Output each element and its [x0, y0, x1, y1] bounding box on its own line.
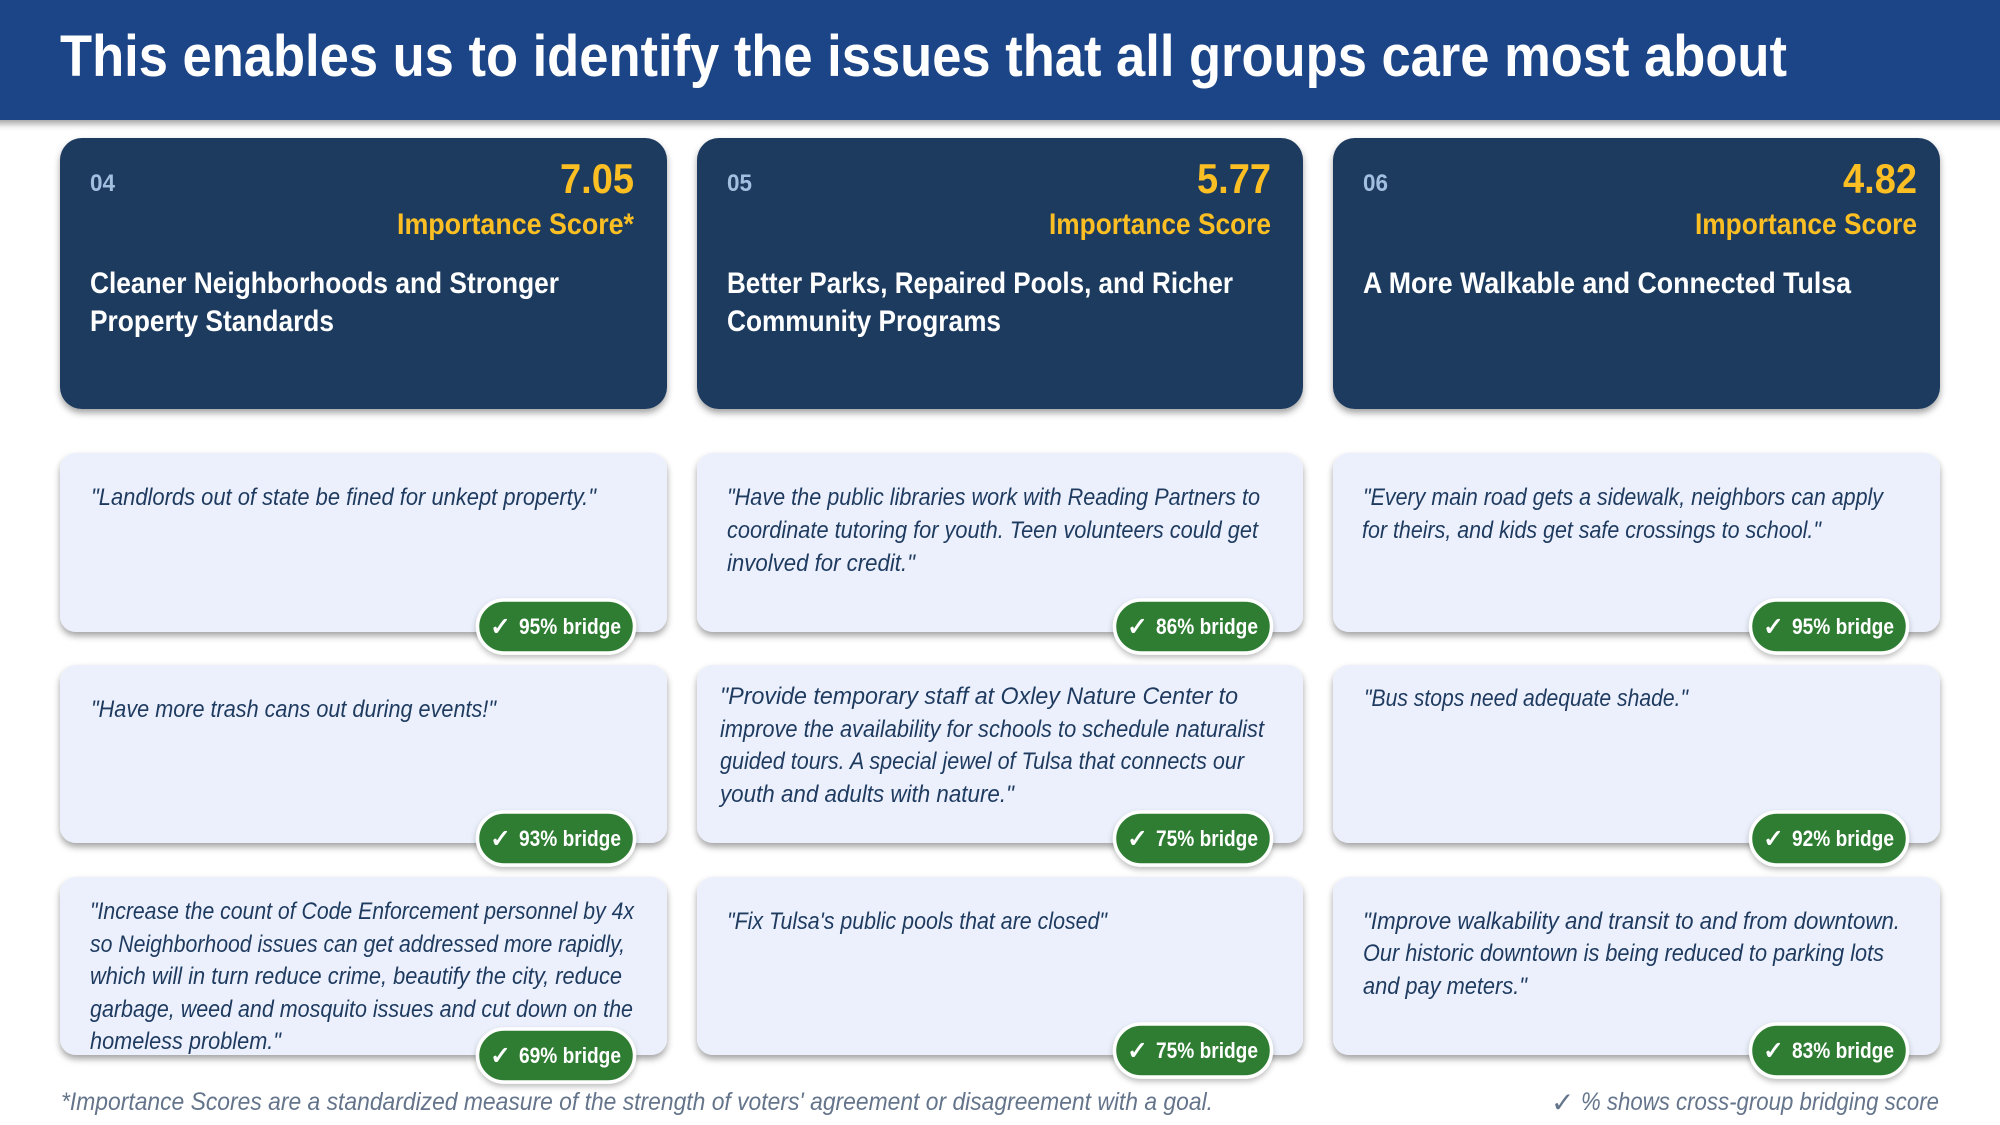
bridge badge [1114, 1024, 1272, 1077]
bridge badge: ✓ [1763, 1036, 1784, 1065]
panel: goal 05 header: 5.77 [1197, 155, 1271, 202]
panel: goal 04 header: Importance Score* [397, 208, 634, 241]
legend: bridging score: ✓ [1551, 1086, 1574, 1119]
quote card: 05 row 1 [697, 453, 1303, 653]
bridge badge [1750, 1024, 1908, 1077]
bridge badge [1114, 812, 1272, 865]
quote card: 04 row 3: "Increase the count of Code Enforcement personnel by 4x [90, 898, 635, 925]
header banner [0, 0, 2000, 120]
quote card: 06 row 2: "Bus stops need adequate shade." [1364, 685, 1689, 712]
quote card: 04 row 3: so Neighborhood issues can get addressed more rapidly, [90, 931, 625, 958]
panel: goal 05 header: Importance Score [1049, 208, 1271, 241]
panel: goal 06 header: 06 [1363, 170, 1388, 197]
bridge badge: ✓ [1127, 824, 1148, 853]
quote card: 06 row 3: and pay meters." [1363, 973, 1528, 1000]
quote card: 06 row 3: "Improve walkability and transit to and from downtown. [1363, 908, 1900, 935]
panel: goal 04 header [60, 138, 667, 409]
panel: goal 04 header: Cleaner Neighborhoods and Stronger [90, 267, 559, 300]
quote card: 06 row 3: Our historic downtown is being reduced to parking lots [1363, 940, 1884, 967]
quote card: 05 row 2: youth and adults with nature." [718, 781, 1015, 808]
panel: goal 06 header: Importance Score [1695, 208, 1917, 241]
bridge badge [478, 1029, 634, 1082]
quote card: 04 row 1: "Landlords out of state be fined for unkept property." [91, 484, 597, 511]
bridge badge: ✓ [490, 1041, 511, 1070]
bridge badge: ✓ [1127, 1036, 1148, 1065]
bridge badge: 93% bridge [519, 826, 621, 851]
panel: goal 04 header: 7.05 [560, 155, 634, 202]
quote card: 05 row 2 [697, 665, 1303, 865]
panel: goal 05 header [697, 138, 1303, 409]
bridge badge: 95% bridge [1792, 614, 1894, 639]
quote card: 05 row 2: guided tours. A special jewel of Tulsa that connects our [720, 748, 1245, 775]
panel: goal 06 header: A More Walkable and Connected Tulsa [1363, 267, 1851, 300]
bridge badge: 92% bridge [1792, 826, 1894, 851]
bridge badge [478, 812, 634, 865]
bridge badge: ✓ [490, 612, 511, 641]
legend: bridging score: % shows cross-group bridging score [1581, 1088, 1939, 1116]
quote card: 05 row 1: coordinate tutoring for youth. Teen volunteers could get [727, 517, 1259, 544]
panel: goal 04 header: 04 [90, 170, 116, 197]
bridge badge: 83% bridge [1792, 1038, 1894, 1063]
footnote: importance score definition: *Importance Scores are a standardized measure of the strength of voters' agreement or disagreement with a goal. [61, 1088, 1213, 1116]
bridge badge [1750, 600, 1908, 653]
quote card: 06 row 2 [1333, 665, 1940, 865]
quote card: 06 row 1: for theirs, and kids get safe crossings to school." [1362, 517, 1822, 544]
panel: goal 05 header: Community Programs [727, 305, 1001, 338]
quote card: 05 row 1: "Have the public libraries work with Reading Partners to [727, 484, 1260, 511]
bridge badge: 75% bridge [1156, 1038, 1258, 1063]
quote card: 04 row 3: garbage, weed and mosquito issues and cut down on the [90, 996, 633, 1023]
bridge badge: 95% bridge [519, 614, 621, 639]
quote card: 05 row 3 [697, 877, 1303, 1077]
quote card: 05 row 2: improve the availability for schools to schedule naturalist [720, 716, 1265, 743]
bridge badge: ✓ [1763, 612, 1784, 641]
quote card: 05 row 2: "Provide temporary staff at Oxley Nature Center to [720, 683, 1238, 710]
quote card: 05 row 1: involved for credit." [727, 550, 916, 577]
title: This enables us to identify the issues that all groups care most about [60, 24, 1787, 89]
quote card: 04 row 3 [60, 877, 667, 1082]
panel: goal 06 header: 4.82 [1843, 155, 1917, 202]
bridge badge: 69% bridge [519, 1043, 621, 1068]
panel: goal 05 header: 05 [727, 170, 752, 197]
bridge badge: 86% bridge [1156, 614, 1258, 639]
quote card: 04 row 1 [60, 453, 667, 653]
quote card: 06 row 1 [1333, 453, 1940, 653]
bridge badge [478, 600, 634, 653]
panel: goal 06 header [1333, 138, 1940, 409]
quote card: 04 row 3: which will in turn reduce crime, beautify the city, reduce [90, 963, 622, 990]
quote card: 04 row 2 [60, 665, 667, 865]
bridge badge: ✓ [1763, 824, 1784, 853]
panel: goal 04 header: Property Standards [90, 305, 334, 338]
bridge badge: ✓ [490, 824, 511, 853]
quote card: 04 row 2: "Have more trash cans out during events!" [91, 696, 497, 723]
bridge badge: 75% bridge [1156, 826, 1258, 851]
quote card: 05 row 3: "Fix Tulsa's public pools that are closed" [727, 908, 1108, 935]
quote card: 04 row 3: homeless problem." [90, 1028, 282, 1055]
bridge badge: ✓ [1127, 612, 1148, 641]
bridge badge [1114, 600, 1272, 653]
panel: goal 05 header: Better Parks, Repaired Pools, and Richer [727, 267, 1233, 300]
quote card: 06 row 1: "Every main road gets a sidewalk, neighbors can apply [1363, 484, 1885, 511]
quote card: 06 row 3 [1333, 877, 1940, 1077]
bridge badge [1750, 812, 1908, 865]
